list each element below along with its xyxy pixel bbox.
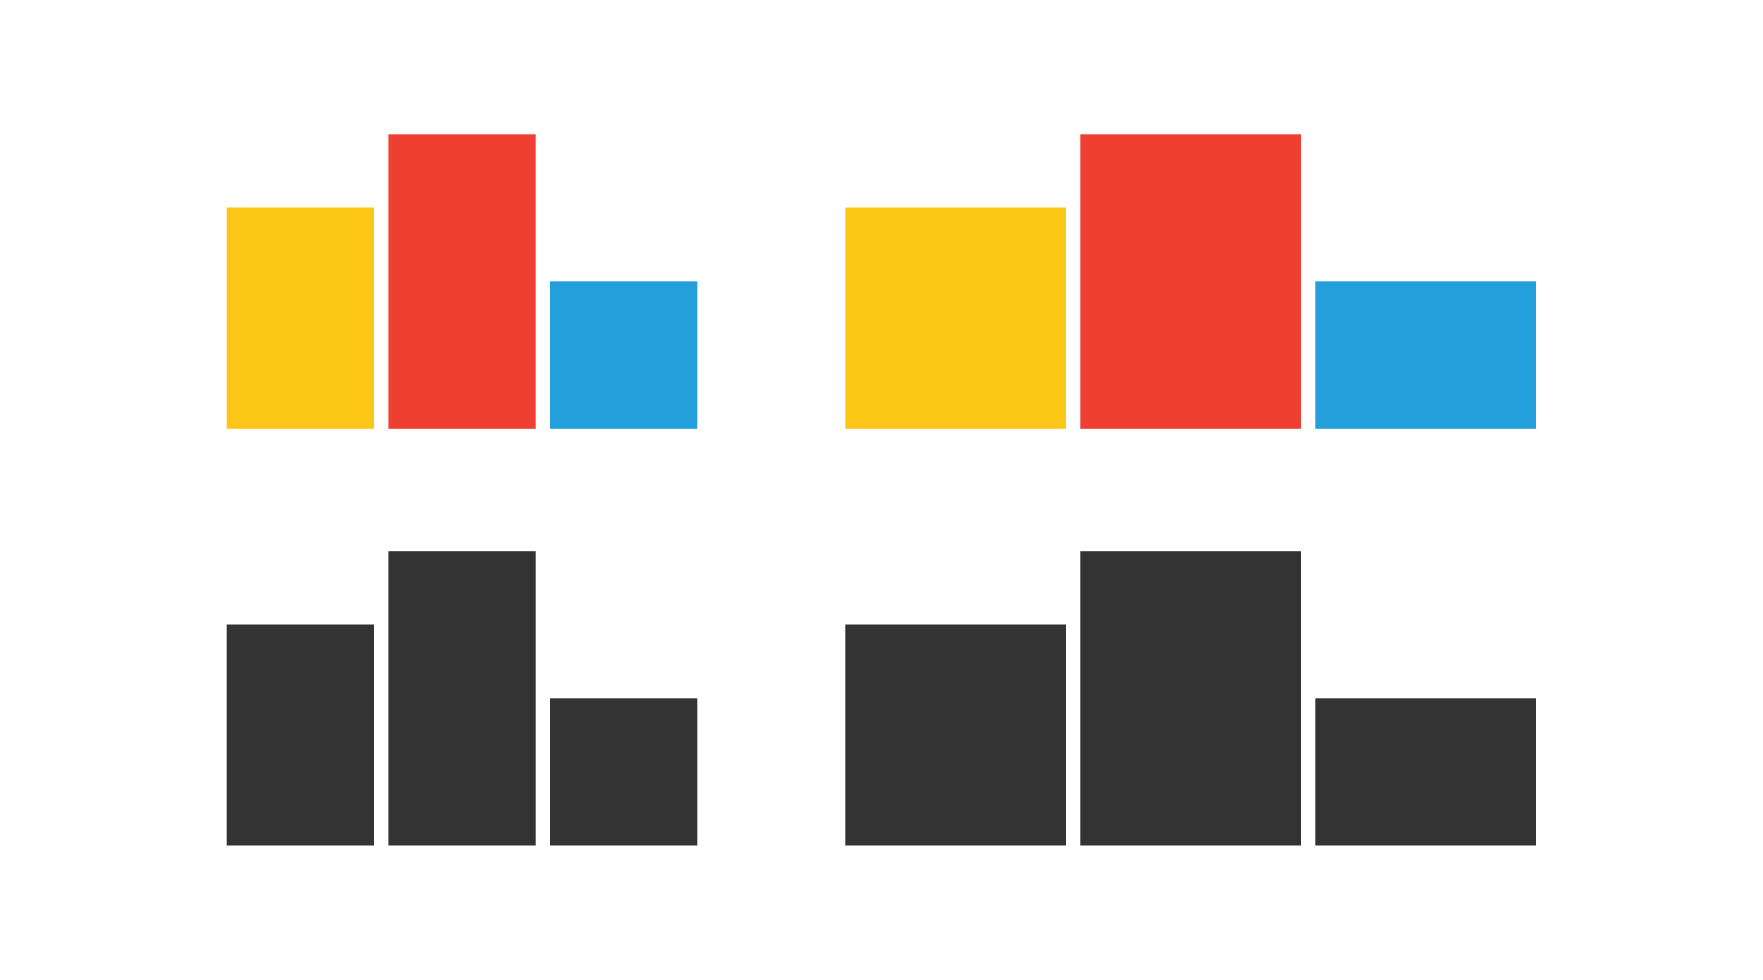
- middle dark bar: [388, 551, 536, 846]
- red bar: [388, 134, 536, 429]
- yellow bar: [845, 208, 1066, 429]
- left dark bar: [227, 624, 374, 846]
- panel: narrow colored bar chart icon: [227, 134, 697, 429]
- blue bar: [550, 281, 697, 429]
- left dark bar: [845, 624, 1066, 846]
- panel: wide dark bar chart icon: [845, 551, 1536, 846]
- right dark bar: [550, 698, 697, 846]
- right dark bar: [1315, 698, 1536, 846]
- blue bar: [1315, 281, 1536, 429]
- panel: narrow dark bar chart icon: [227, 551, 697, 846]
- panel: wide colored bar chart icon: [845, 134, 1536, 429]
- middle dark bar: [1080, 551, 1301, 846]
- yellow bar: [227, 208, 374, 429]
- red bar: [1080, 134, 1301, 429]
